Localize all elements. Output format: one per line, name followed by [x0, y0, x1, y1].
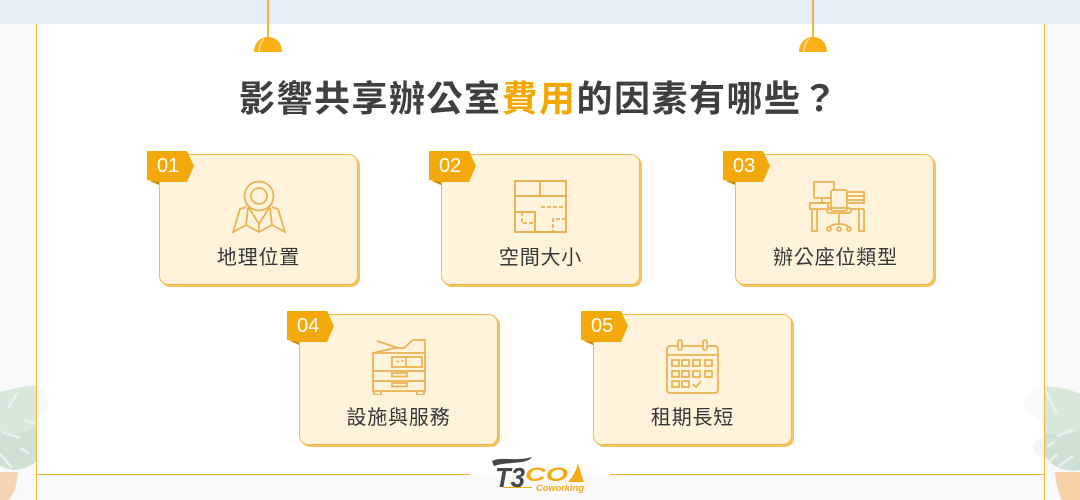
- badge 01: [147, 151, 194, 185]
- lamp left: [254, 0, 282, 52]
- top band: [0, 0, 1080, 24]
- side background left: [0, 24, 36, 500]
- frame right line: [1044, 24, 1045, 500]
- badge 01: 01: [157, 155, 179, 177]
- icon: desk and chair: [809, 181, 865, 232]
- badge 04: 04: [297, 315, 319, 337]
- footer line right: [610, 474, 1045, 475]
- badge 03: 03: [733, 155, 755, 177]
- icon: map pin: [232, 180, 286, 234]
- card 02: floor plan: [441, 154, 640, 285]
- lamp right: [799, 0, 827, 52]
- badge 03: [723, 151, 770, 185]
- label: 設施與服務: [346, 407, 450, 429]
- plant right shade: [1033, 439, 1044, 456]
- footer line left: [36, 474, 470, 475]
- label: 空間大小: [499, 247, 582, 269]
- badge 02: [429, 151, 476, 185]
- icon: floor plan: [514, 180, 567, 233]
- label: 地理位置: [217, 247, 300, 269]
- badge 04: [287, 311, 334, 345]
- plant right: [1045, 386, 1080, 500]
- side background right: [1045, 24, 1080, 500]
- label: 租期長短: [651, 407, 734, 429]
- footer background: [36, 475, 1044, 500]
- icon: copier: [372, 339, 426, 395]
- logo underline: [503, 487, 532, 488]
- logo sail: [568, 463, 584, 482]
- icon: calendar: [666, 339, 719, 394]
- badge 05: 05: [591, 315, 613, 337]
- card 03: desk: [735, 154, 934, 285]
- logo CO: CO: [525, 465, 568, 486]
- title: 影響共享辦公室費用的因素有哪些？: [239, 78, 839, 119]
- logo T3: T3: [495, 462, 525, 493]
- badge 05: [581, 311, 628, 345]
- logo coworking: Coworking: [536, 483, 584, 494]
- badge 02: 02: [439, 155, 461, 177]
- plant left: [0, 386, 36, 500]
- card 04: printer: [299, 314, 498, 445]
- label: 辦公座位類型: [773, 247, 898, 269]
- plant left shade: [37, 384, 49, 434]
- card 05: calendar: [593, 314, 792, 445]
- card 01: location: [159, 154, 358, 285]
- frame left line: [36, 24, 37, 500]
- logo: [492, 457, 584, 494]
